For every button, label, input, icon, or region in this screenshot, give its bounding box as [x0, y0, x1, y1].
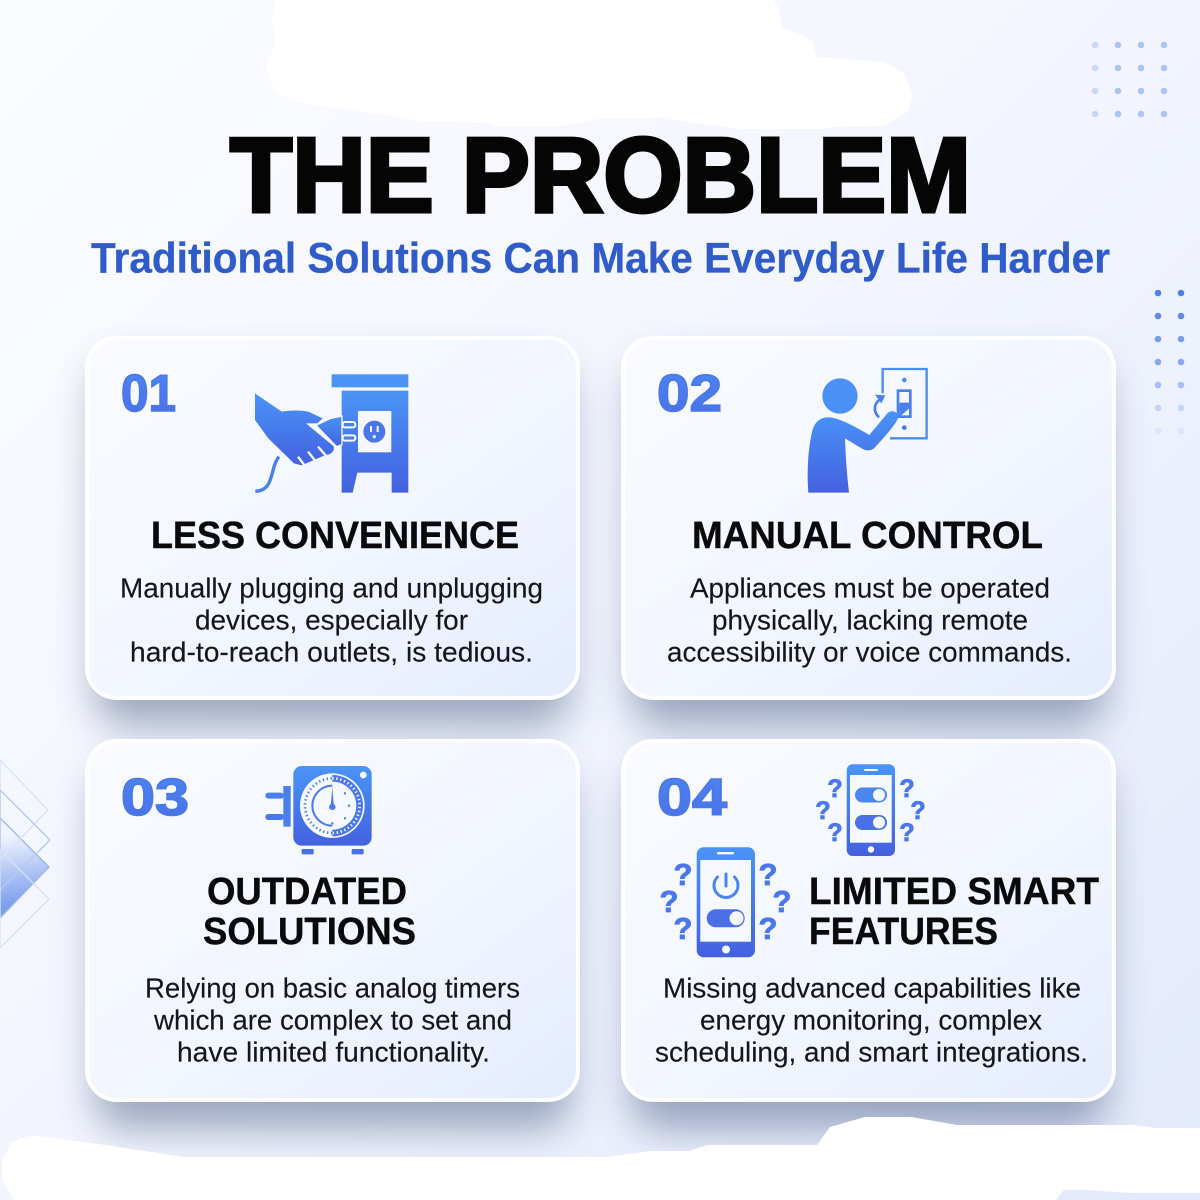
heading — [809, 871, 1099, 953]
body text — [145, 972, 520, 1068]
icon: phone with power and toggle — [660, 847, 791, 957]
icon: phone with power and toggle: ? — [674, 857, 692, 892]
panel: limited smart features — [623, 741, 1114, 1129]
icon: phone with toggles: ? — [899, 819, 915, 847]
icon: phone with toggles: ? — [899, 775, 915, 803]
body text: energy monitoring, complex — [700, 1004, 1042, 1036]
heading: LIMITED SMART — [809, 871, 1099, 913]
number 02: 02 — [657, 365, 722, 423]
body text: which are complex to set and — [153, 1004, 512, 1036]
body text: have limited functionality. — [177, 1036, 490, 1068]
decoration: dot column right — [1155, 290, 1184, 434]
number 03: 03 — [121, 769, 189, 827]
body text: hard-to-reach outlets, is tedious. — [130, 636, 533, 668]
number 04: 04 — [657, 769, 727, 827]
icon: phone with power and toggle: ? — [773, 884, 791, 919]
heading: MANUAL CONTROL — [692, 515, 1043, 557]
icon: person flipping switch — [808, 369, 927, 493]
icon: analog timer — [265, 766, 372, 854]
icon: phone with toggles: ? — [827, 819, 843, 847]
decoration: white patch top — [266, 0, 913, 129]
icon: phone with power and toggle: ? — [674, 911, 692, 946]
icon: phone with toggles: ? — [910, 797, 926, 825]
subtitle: Traditional Solutions Can Make Everyday Life Harder — [91, 234, 1110, 282]
panel: outdated solutions — [87, 741, 578, 1129]
icon: phone with power and toggle: ? — [759, 911, 777, 946]
body text: Manually plugging and unplugging — [120, 572, 543, 604]
decoration: white patch bottom — [2, 1117, 1200, 1200]
heading: SOLUTIONS — [203, 911, 416, 953]
decoration: diamonds left — [0, 760, 50, 948]
decoration: dot grid top right — [1092, 42, 1167, 117]
body text: devices, especially for — [195, 604, 468, 636]
heading: LESS CONVENIENCE — [151, 515, 519, 557]
body text: Missing advanced capabilities like — [663, 972, 1081, 1004]
panel: less convenience — [87, 338, 578, 726]
number 01: 01 — [121, 365, 176, 423]
heading: FEATURES — [809, 911, 998, 953]
body text — [667, 572, 1072, 668]
heading — [203, 871, 416, 953]
body text — [120, 572, 543, 668]
body text: accessibility or voice commands. — [667, 636, 1072, 668]
body text: Relying on basic analog timers — [145, 972, 520, 1004]
icon: phone with toggles — [815, 764, 926, 856]
body text: physically, lacking remote — [712, 604, 1028, 636]
icon: phone with toggles: ? — [827, 775, 843, 803]
icon: phone with power and toggle: ? — [660, 884, 678, 919]
title: THE PROBLEM — [230, 116, 971, 234]
body text: scheduling, and smart integrations. — [655, 1036, 1088, 1068]
body text: Appliances must be operated — [690, 572, 1050, 604]
panel: manual control — [623, 338, 1114, 726]
body text — [655, 972, 1088, 1068]
icon: phone with power and toggle: ? — [759, 857, 777, 892]
icon: phone with toggles: ? — [815, 797, 831, 825]
icon: hand plugging into outlet — [255, 374, 408, 493]
heading: OUTDATED — [207, 871, 407, 913]
